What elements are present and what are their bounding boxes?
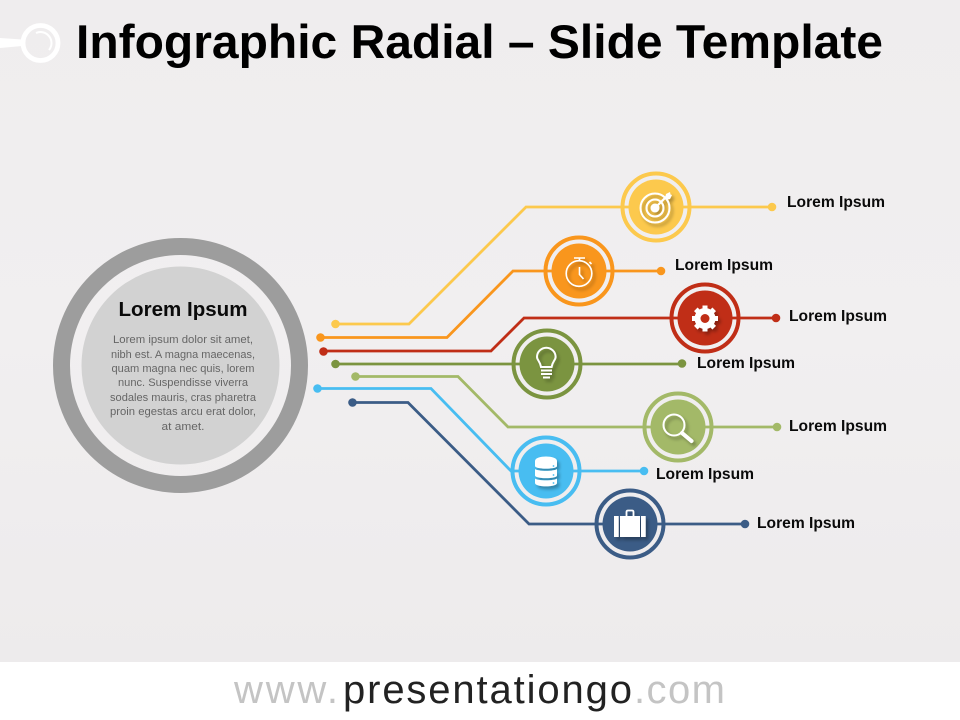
label: Lorem Ipsum xyxy=(789,308,887,325)
central body text: nunc. Suspendisse viverra xyxy=(118,377,249,389)
label: Lorem Ipsum xyxy=(675,257,773,274)
connector line xyxy=(335,207,772,324)
central body text: sodales mauris, cras pharetra xyxy=(110,392,257,404)
label: Lorem Ipsum xyxy=(789,418,887,435)
footer website url: presentationgo xyxy=(343,668,632,712)
branch 4: olive light bulb xyxy=(331,330,795,398)
icon: target xyxy=(640,192,672,222)
node circle xyxy=(622,174,690,240)
branch 1: yellow target xyxy=(331,174,885,328)
connector line xyxy=(335,363,682,365)
icon: briefcase xyxy=(614,510,646,537)
central heading: Lorem Ipsum xyxy=(118,298,248,321)
node circle xyxy=(596,490,664,558)
node circle xyxy=(672,284,738,352)
central body text xyxy=(110,334,257,433)
branch 2: orange stopwatch xyxy=(316,238,773,342)
inner disc xyxy=(82,266,280,464)
logo pin icon xyxy=(0,26,58,60)
icon: light bulb xyxy=(537,348,556,378)
icon: database xyxy=(535,456,557,486)
connector line xyxy=(320,271,661,338)
central circle panel xyxy=(62,246,300,484)
icon: stopwatch xyxy=(566,258,592,286)
label: Lorem Ipsum xyxy=(787,194,885,211)
icon: magnifier xyxy=(664,414,692,441)
footer website url: .com xyxy=(634,668,725,712)
title: Infographic Radial – Slide Template xyxy=(76,15,883,68)
icon: gear xyxy=(692,306,718,332)
node circle xyxy=(644,394,712,460)
node circle xyxy=(546,238,612,304)
label: Lorem Ipsum xyxy=(697,355,795,372)
connector line xyxy=(317,388,644,471)
footer website url: www. xyxy=(233,668,338,712)
connector line xyxy=(352,402,745,524)
connector line xyxy=(323,318,776,351)
label: Lorem Ipsum xyxy=(757,515,855,532)
node circle xyxy=(512,438,580,504)
central body text: at amet. xyxy=(162,421,204,433)
central body text: nibh est. A magna maecenas, xyxy=(111,349,255,361)
branch 5: light green magnifier xyxy=(351,372,887,460)
branch 6: sky blue database xyxy=(313,384,754,504)
branch 3: red gear xyxy=(319,284,887,356)
node circle xyxy=(514,330,580,398)
central body text: Lorem ipsum dolor sit amet, xyxy=(113,334,253,346)
central body text: proin egestas arcu erat dolor, xyxy=(110,406,256,418)
outer grey ring xyxy=(62,246,300,484)
branch 7: navy briefcase xyxy=(348,398,855,558)
central body text: quam magna nec quis, lorem xyxy=(112,363,254,375)
label: Lorem Ipsum xyxy=(656,466,754,483)
footer website url xyxy=(233,668,725,712)
connector line xyxy=(355,376,777,427)
